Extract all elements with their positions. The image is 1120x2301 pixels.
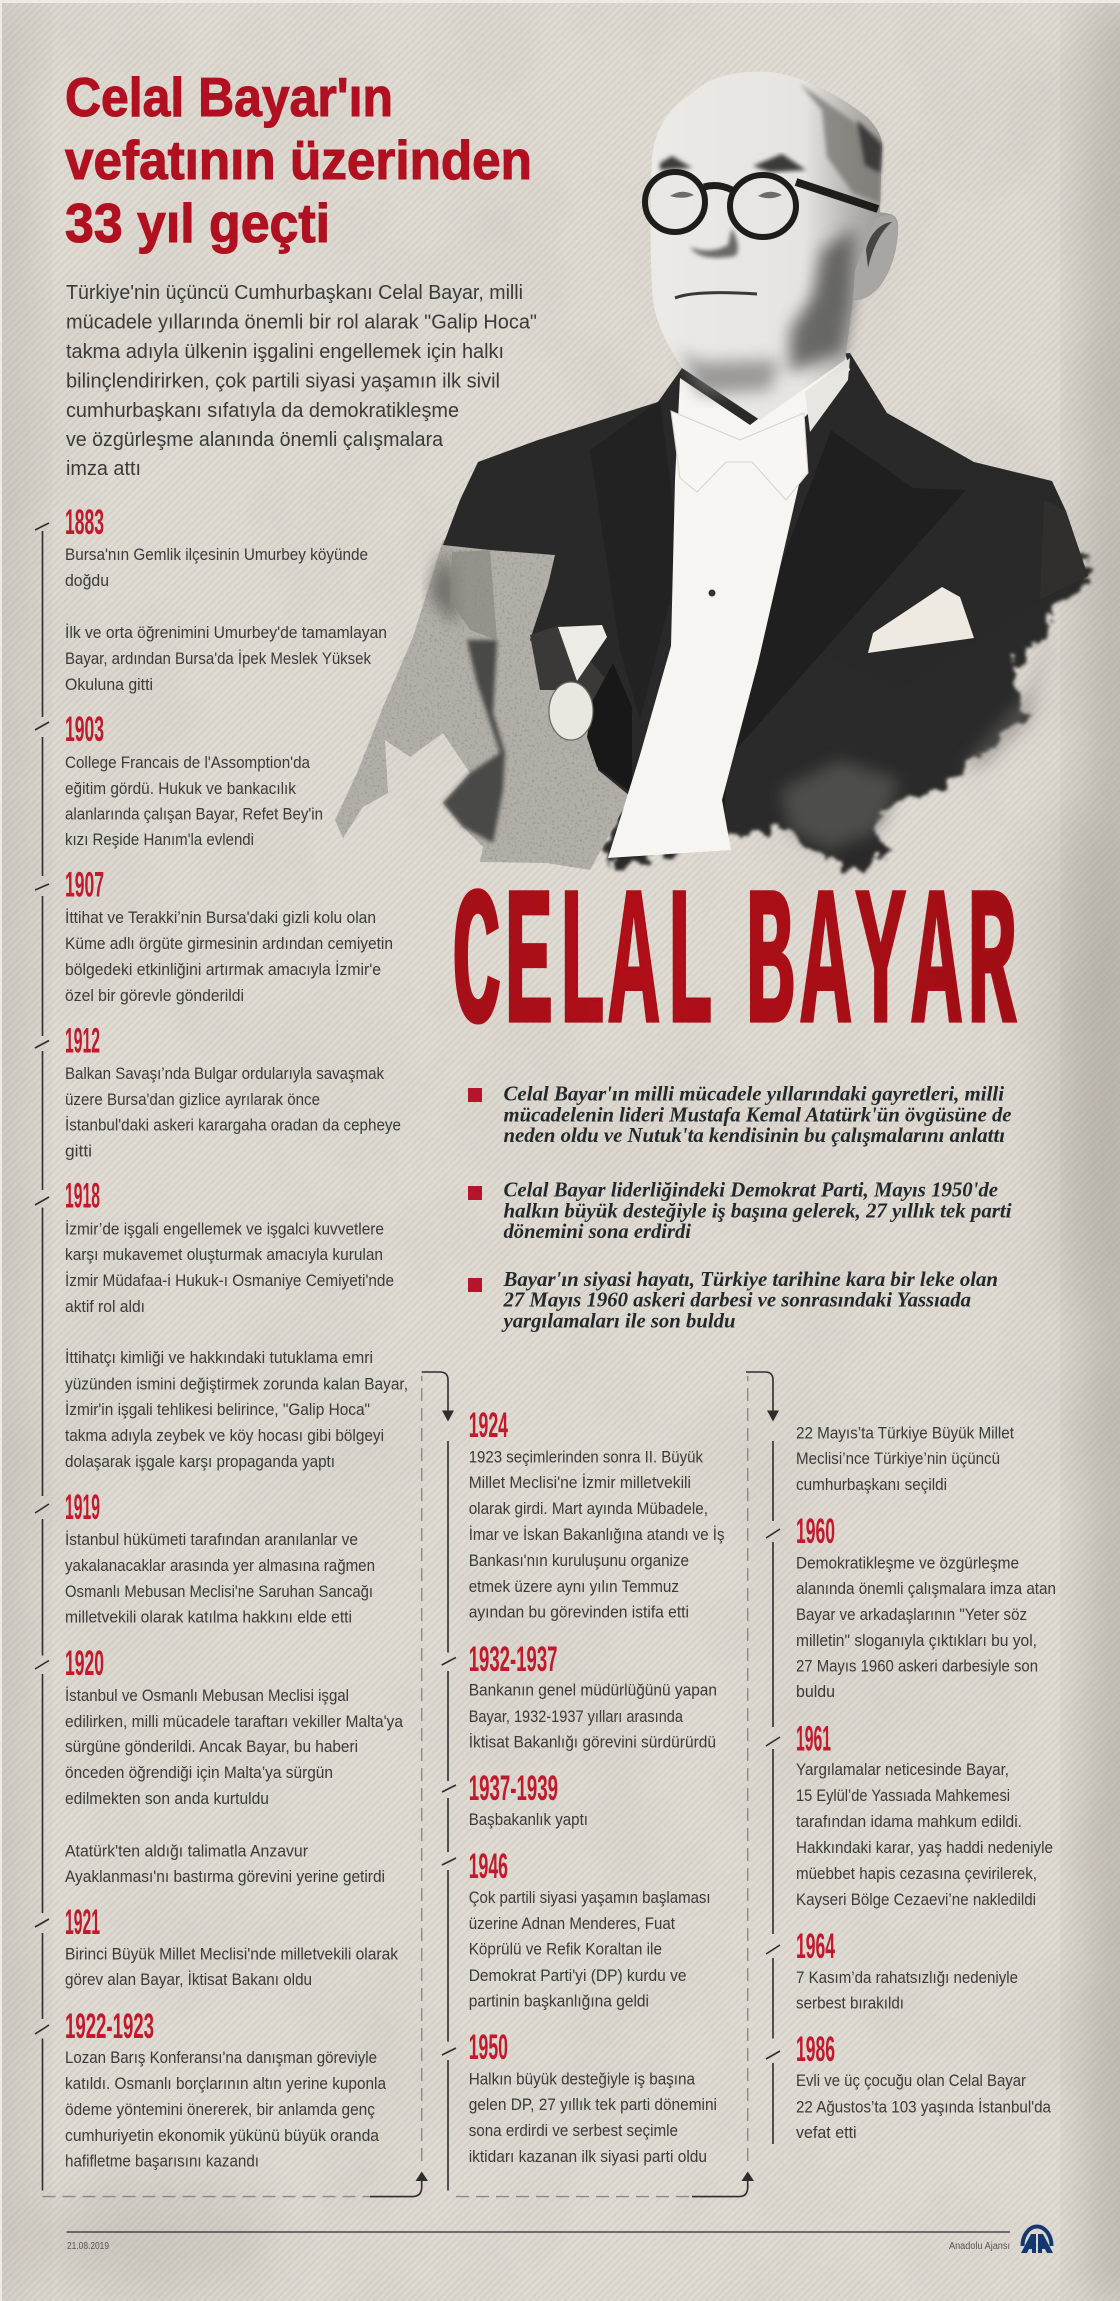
bullet 3: 27 Mayıs 1960 askeri darbesi ve sonrasındaki Yassıada: [503, 1288, 971, 1312]
entry 1907: Küme adlı örgüte girmesinin ardından cemiyetin: [65, 934, 393, 953]
entry 1932-1937: 1932-1937: [469, 1640, 558, 1679]
sleeve dark stains: [443, 640, 505, 843]
entry 1960: Demokratikleşme ve özgürleşme: [796, 1554, 1019, 1572]
portrait of Celal Bayar: [335, 72, 1088, 870]
entry 1950: iktidarı kazanan ilk siyasi parti oldu: [469, 2147, 707, 2166]
intro text: takma adıyla ülkenin işgalini engellemek için halkı: [66, 341, 504, 363]
entry 1986: 22 Ağustos’ta 103 yaşında İstanbul'da: [796, 2098, 1051, 2117]
icon: AA logo: [1021, 2226, 1053, 2253]
bullet 1: Celal Bayar'ın milli mücadele yıllarındaki gayretleri, milli: [504, 1082, 1004, 1106]
entry 1946: üzerine Adnan Menderes, Fuat: [469, 1914, 675, 1933]
frayed jacket base: [610, 500, 1088, 870]
entry 1924: Bankası'nın kuruluşunu organize: [469, 1551, 689, 1570]
cheek shadow: [790, 228, 855, 372]
entry 1924: Millet Meclisi'ne İzmir milletvekili: [469, 1473, 691, 1492]
entry 1883: [65, 503, 387, 694]
entry 1960: milletin" sloganıyla çıktıkları bu yol,: [796, 1631, 1037, 1650]
entry 1961: Yargılamalar neticesinde Bayar,: [796, 1760, 1009, 1779]
entry 1921: görev alan Bayar, İktisat Bakanı oldu: [65, 1970, 312, 1989]
entry 1946: partinin başkanlığına geldi: [469, 1992, 649, 2011]
entry 1964: serbest bırakıldı: [796, 1994, 904, 2012]
entry 1921: [65, 1903, 398, 1989]
intro text: imza attı: [66, 458, 141, 480]
connector arrow left to middle: [42, 1372, 454, 2197]
entry 1883: Okuluna gitti: [65, 675, 153, 694]
entry 1918: takma adıyla zeybek ve köy hocası gibi bölgeyi: [65, 1426, 384, 1445]
entry 1937-1939: Başbakanlık yaptı: [469, 1810, 588, 1829]
entry 1960: Bayar ve arkadaşlarının "Yeter söz: [796, 1605, 1027, 1624]
entry 1922-1923: 1922-1923: [65, 2007, 154, 2046]
medal: [549, 625, 607, 740]
entry 1922-1923: [65, 2007, 386, 2170]
entry 1961: müebbet hapis cezasına çevirilerek,: [796, 1864, 1037, 1883]
entry 1950: 1950: [469, 2028, 508, 2067]
collar: [805, 358, 850, 432]
entry 1920: Ayaklanması'nı bastırma görevini yerine getirdi: [65, 1867, 385, 1886]
entry 1946: 1946: [469, 1847, 508, 1886]
shirt front: [608, 353, 850, 858]
entry 1919: İstanbul hükümeti tarafından aranılanlar ve: [65, 1530, 358, 1549]
entry 1919: Osmanlı Mebusan Meclisi'ne Saruhan Sancağı: [65, 1582, 373, 1601]
entry 1907: [65, 866, 393, 1005]
entry 1883: Bursa'nın Gemlik ilçesinin Umurbey köyünde: [65, 545, 368, 564]
entry 1946: Köprülü ve Refik Koraltan ile: [469, 1940, 662, 1959]
entry 1919: yakalanacaklar arasında yer almasına rağmen: [65, 1556, 375, 1575]
entry continued: 22 Mayıs: [796, 1424, 1014, 1494]
entry 1903: alanlarında çalışan Bayar, Refet Bey'in: [65, 804, 323, 824]
entry 1919: milletvekili olarak katılma hakkını elde etti: [65, 1608, 352, 1626]
title: Celal Bayar'ın: [65, 66, 393, 128]
timeline lines middle column: [442, 1441, 456, 2190]
entry 1946: [469, 1847, 711, 2011]
bullet 1: [468, 1082, 1012, 1147]
entry 1932-1937: İktisat Bakanlığı görevini sürdürürdü: [469, 1732, 716, 1752]
eyes: [670, 192, 782, 198]
entry 1918: aktif rol aldı: [65, 1297, 145, 1316]
entry 1964: [796, 1927, 1018, 2012]
entry continued: 22 Mayıs: 22 Mayıs’ta Türkiye Büyük Millet: [796, 1424, 1014, 1443]
bullet 2: dönemini sona erdirdi: [504, 1219, 691, 1243]
entry 1937-1939: [469, 1769, 588, 1829]
entry 1912: gitti: [65, 1142, 92, 1160]
date: 21.08.2019: [67, 2241, 109, 2252]
key point bullets: [468, 1082, 1012, 1333]
entry 1922-1923: katıldı. Osmanlı borçlarının altın yerine kuponla: [65, 2074, 386, 2093]
entry 1907: 1907: [65, 866, 104, 904]
entry 1922-1923: Lozan Barış Konferansı'na danışman göreviyle: [65, 2048, 377, 2067]
entry 1912: 1912: [65, 1022, 100, 1061]
entry 1921: 1921: [65, 1903, 100, 1942]
footer: [67, 2226, 1053, 2253]
title: 33 yıl geçti: [65, 192, 330, 254]
entry 1932-1937: [469, 1640, 717, 1752]
entry 1912: [65, 1022, 401, 1160]
intro text: [66, 282, 537, 480]
head: [651, 72, 898, 420]
entry 1924: [469, 1406, 724, 1622]
entry 1921: Birinci Büyük Millet Meclisi'nde milletvekili olarak: [65, 1944, 398, 1964]
entry 1912: Balkan Savaşı’nda Bulgar ordularıyla savaşmak: [65, 1064, 384, 1083]
bow tie: [671, 411, 808, 500]
entry 1961: [796, 1720, 1053, 1909]
entry 1964: 7 Kasım’da rahatsızlığı nedeniyle: [796, 1968, 1018, 1987]
entry 1946: Demokrat Parti'yi (DP) kurdu ve: [469, 1966, 686, 1985]
entry 1918: İttihatçı kimliği ve hakkındaki tutuklama emri: [65, 1348, 373, 1367]
entry 1986: [796, 2030, 1051, 2142]
entry 1950: Halkın büyük desteğiyle iş başına: [469, 2070, 695, 2088]
entry 1920: Atatürk'ten aldığı talimatla Anzavur: [65, 1842, 308, 1860]
source: Anadolu Ajansı: [949, 2241, 1010, 2252]
entry 1903: [65, 710, 323, 849]
mottled fade at jacket hem: [780, 760, 900, 850]
entry 1919: 1919: [65, 1488, 100, 1527]
entry 1903: eğitim gördü. Hukuk ve bankacılık: [65, 779, 296, 798]
entry 1924: ayından bu görevinden istifa etti: [469, 1603, 689, 1622]
entry 1918: dolaşarak işgale karşı propaganda yaptı: [65, 1452, 335, 1471]
entry 1907: bölgedeki etkinliğini artırmak amacıyla İzmir'e: [65, 960, 381, 979]
entry 1924: olarak girdi. Mart ayında Mübadele,: [469, 1499, 708, 1518]
bullet 3: [468, 1267, 998, 1333]
entry 1907: özel bir görevle gönderildi: [65, 986, 244, 1005]
entry 1986: vefat etti: [796, 2123, 857, 2142]
entry 1920: edilmekten son anda kurtuldu: [65, 1789, 269, 1808]
entry 1883: doğdu: [65, 571, 109, 590]
entry 1920: sürgüne gönderildi. Ancak Bayar, bu haberi: [65, 1737, 358, 1756]
hair shading: [800, 84, 880, 203]
entry 1986: Evli ve üç çocuğu olan Celal Bayar: [796, 2071, 1026, 2090]
entry 1960: [796, 1512, 1056, 1701]
bullet 2: halkın büyük desteğiyle iş başına gelerek, 27 yıllık tek parti: [504, 1199, 1012, 1223]
entry 1883: Bayar, ardından Bursa'da İpek Meslek Yüksek: [65, 649, 371, 668]
bullet 1: mücadelenin lideri Mustafa Kemal Atatürk'ün övgüsüne de: [504, 1103, 1012, 1127]
entry 1964: 1964: [796, 1927, 835, 1966]
entry 1922-1923: hafifletme başarısını kazandı: [65, 2152, 259, 2170]
bullet 2: Celal Bayar liderliğindeki Demokrat Parti, Mayıs 1950'de: [504, 1178, 998, 1202]
bullet 2: [468, 1178, 1012, 1243]
entry 1960: buldu: [796, 1682, 835, 1701]
entry 1918: İzmir'in işgali tehlikesi belirince, "Galip Hoca": [65, 1400, 370, 1419]
entry 1918: İzmir’de işgali engellemek ve işgalci kuvvetlere: [65, 1220, 384, 1238]
entry 1918: yüzünden ismini değiştirmek zorunda kalan Bayar,: [65, 1375, 408, 1394]
entry 1961: 15 Eylül’de Yassıada Mahkemesi: [796, 1786, 1010, 1805]
entry 1903: College Francais de l'Assomption'da: [65, 753, 310, 772]
intro text: mücadele yıllarında önemli bir rol alarak "Galip Hoca": [66, 312, 537, 334]
timeline lines right column: [766, 1441, 780, 2144]
entry 1937-1939: 1937-1939: [469, 1769, 558, 1808]
glasses: [645, 172, 878, 237]
entry 1950: [469, 2028, 717, 2166]
entry 1907: İttihat ve Terakki’nin Bursa'daki gizli kolu olan: [65, 908, 376, 927]
entry 1922-1923: ödeme yöntemini önererek, bir anlamda genç: [65, 2100, 375, 2119]
entry 1922-1923: cumhuriyetin ekonomik yükünü büyük oranda: [65, 2126, 379, 2145]
nose and mouth: [690, 228, 738, 258]
intro text: cumhurbaşkanı sıfatıyla da demokratikleşme: [66, 400, 459, 422]
jacket upper: [443, 353, 1088, 796]
entry 1920: İstanbul ve Osmanlı Mebusan Meclisi işgal: [65, 1686, 349, 1705]
entry 1960: 1960: [796, 1512, 835, 1551]
intro text: bilinçlendirirken, çok partili siyasi yaşamın ilk sivil: [66, 370, 500, 392]
entry 1920: 1920: [65, 1644, 104, 1683]
intro text: Türkiye'nin üçüncü Cumhurbaşkanı Celal Bayar, milli: [66, 282, 523, 304]
entry 1920: önceden öğrendiği için Malta’ya sürgün: [65, 1763, 333, 1782]
entry 1946: Çok partili siyasi yaşamın başlaması: [469, 1888, 711, 1907]
ear: [853, 215, 898, 300]
entry continued: 22 Mayıs: cumhurbaşkanı seçildi: [796, 1475, 947, 1494]
entry 1912: üzere Bursa'dan gizlice ayrılarak önce: [65, 1090, 320, 1109]
entry 1986: 1986: [796, 2030, 835, 2069]
entry 1883: 1883: [65, 503, 104, 542]
entry 1961: tarafından idama mahkum edildi.: [796, 1812, 1022, 1831]
entry 1918: İzmir Müdafaa-i Hukuk-ı Osmaniye Cemiyeti'nde: [65, 1271, 394, 1290]
entry 1924: etmek üzere aynı yılın Temmuz: [469, 1577, 679, 1596]
entry 1924: 1924: [469, 1406, 508, 1445]
entry 1883: İlk ve orta öğrenimini Umurbey'de tamamlayan: [65, 623, 387, 642]
entry continued: 22 Mayıs: Meclisi’nce Türkiye’nin üçüncü: [796, 1449, 1000, 1468]
entry 1932-1937: Bayar, 1932-1937 yılları arasında: [469, 1707, 683, 1726]
entry 1918: karşı mukavemet oluşturmak amacıyla kurulan: [65, 1245, 383, 1264]
timeline lines left column: [35, 523, 49, 2190]
entry 1903: kızı Reşide Hanım'la evlendi: [65, 830, 254, 849]
right lapel: [700, 430, 966, 830]
entry 1912: İstanbul'daki askeri karargaha oradan da cepheye: [65, 1116, 401, 1135]
connector arrow middle to right: [456, 1372, 779, 2197]
faded left sleeve: [335, 540, 660, 870]
entry 1920: [65, 1644, 403, 1886]
entry 1918: 1918: [65, 1177, 100, 1216]
entry 1960: alanında önemli çalışmalara imza atan: [796, 1579, 1056, 1598]
entry 1918: [65, 1177, 408, 1471]
entry 1960: 27 Mayıs 1960 askeri darbesiyle son: [796, 1656, 1038, 1676]
bullet 1: neden oldu ve Nutuk'ta kendisinin bu çalışmalarını anlattı: [504, 1123, 1005, 1147]
big name heading: CELAL BAYAR: [452, 859, 1017, 1081]
entry 1961: Hakkındaki karar, yaş haddi nedeniyle: [796, 1838, 1053, 1857]
entry 1950: gelen DP, 27 yıllık tek parti dönemini: [469, 2095, 717, 2114]
entry 1920: edilirken, milli mücadele taraftarı vekiller Malta'ya: [65, 1712, 403, 1731]
entry 1903: 1903: [65, 710, 104, 749]
entry 1961: 1961: [796, 1720, 831, 1758]
entry 1919: [65, 1488, 375, 1626]
title: [65, 66, 532, 254]
intro text: ve özgürleşme alanında önemli çalışmalara: [66, 429, 444, 451]
bullet 3: yargılamaları ile son buldu: [501, 1309, 736, 1333]
entry 1924: İmar ve İskan Bakanlığına atandı ve İş: [469, 1525, 724, 1544]
eyebrows: [660, 154, 806, 172]
bullet 3: Bayar'ın siyasi hayatı, Türkiye tarihine kara bir leke olan: [503, 1267, 998, 1291]
pocket square: [868, 587, 974, 653]
title: vefatının üzerinden: [65, 129, 532, 191]
entry 1961: Kayseri Bölge Cezaevi’ne nakledildi: [796, 1890, 1036, 1909]
entry 1932-1937: Bankanın genel müdürlüğünü yapan: [469, 1680, 717, 1699]
entry 1924: 1923 seçimlerinden sonra II. Büyük: [469, 1448, 703, 1466]
entry 1950: sona erdirdi ve serbest seçimle: [469, 2121, 678, 2140]
